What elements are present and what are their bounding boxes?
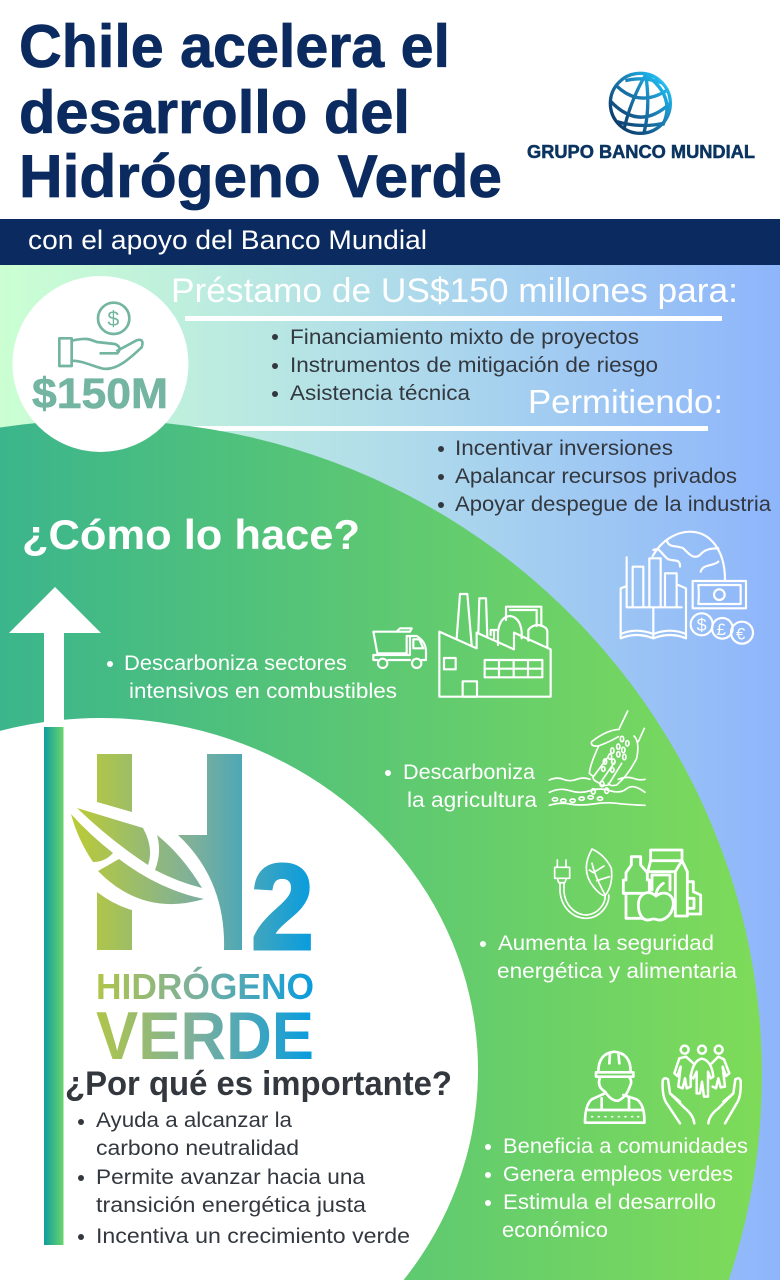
permitting list: Incentivar inversiones	[455, 437, 673, 460]
heading: como lo hace: ¿Cómo lo hace?	[22, 511, 360, 558]
subtitle band	[0, 219, 780, 265]
logo: Grupo Banco Mundial	[527, 73, 755, 162]
item: seguridad	[480, 932, 737, 983]
numeral 2: 2	[251, 839, 314, 975]
icon: hand with coin: $	[107, 307, 119, 331]
loan list: Financiamiento mixto de proyectos	[290, 326, 639, 349]
arrow	[9, 587, 101, 1245]
logo: H2 hidrogeno verde	[71, 754, 314, 1074]
icon: plug and leaf	[555, 849, 612, 918]
amount: $150M	[32, 370, 168, 418]
icon: hands holding people	[663, 1046, 741, 1123]
loan list: Asistencia técnica	[290, 382, 470, 405]
permitting heading: Permitiendo:	[528, 383, 723, 420]
icon: truck and factory	[373, 594, 551, 697]
icon: worker	[585, 1052, 644, 1123]
permitting list	[438, 437, 771, 516]
icon: globe, book, money: $	[697, 615, 707, 635]
item: agricultura: la agricultura	[407, 789, 537, 812]
item: sectores intensivos: intensivos en combustibles	[129, 680, 397, 703]
item: agricultura	[385, 761, 537, 812]
green semicircle panel	[0, 420, 762, 1280]
white inner semicircle panel	[0, 718, 478, 1280]
importance list: Incentiva un crecimiento verde	[96, 1225, 410, 1248]
permitting list: Apoyar despegue de la industria	[455, 493, 771, 516]
H right stem	[178, 754, 242, 950]
item: comunidades: Beneficia a comunidades	[503, 1135, 748, 1158]
item: comunidades: Genera empleos verdes	[503, 1163, 733, 1186]
loan heading: Préstamo de US$150 millones para:	[171, 272, 738, 310]
icon: groceries	[623, 850, 701, 920]
title: Chile acelera el	[19, 13, 450, 80]
title: desarrollo del	[19, 79, 410, 146]
item: sectores intensivos: Descarboniza sectores	[124, 652, 347, 675]
leaf	[71, 808, 204, 904]
money circle	[12, 276, 188, 452]
importance list: Ayuda a alcanzar la	[96, 1109, 292, 1132]
icon: globe, book, money	[621, 532, 753, 644]
icon: hand with coin	[59, 303, 142, 369]
importance list: Permite avanzar hacia una	[96, 1166, 365, 1189]
wordmark: HIDRÓGENO	[96, 965, 314, 1007]
item: comunidades	[485, 1135, 748, 1242]
logo: H2 hidrogeno verde: VERDE	[96, 998, 314, 1074]
icon: globe, book, money: €	[736, 624, 746, 643]
item: seguridad: energética y alimentaria	[497, 960, 737, 983]
item: sectores intensivos	[107, 652, 397, 703]
icon: globe	[610, 73, 670, 133]
item: seguridad: Aumenta la seguridad	[498, 932, 714, 955]
importance list	[78, 1109, 410, 1248]
item: comunidades: Estimula el desarrollo	[503, 1191, 716, 1214]
loan list	[272, 326, 658, 405]
H left stem	[97, 754, 132, 950]
item: comunidades: económico	[502, 1219, 608, 1242]
importance list: carbono neutralidad	[96, 1137, 299, 1160]
icon: hand sowing seeds	[549, 711, 645, 805]
logo text: GRUPO BANCO MUNDIAL	[527, 142, 755, 162]
title	[19, 13, 502, 210]
subtitle band: con el apoyo del Banco Mundial	[28, 225, 427, 255]
item: agricultura: Descarboniza	[403, 761, 535, 784]
permitting list: Apalancar recursos privados	[455, 465, 737, 488]
title: Hidrógeno Verde	[19, 143, 502, 210]
importance list: transición energética justa	[96, 1194, 366, 1217]
background panel	[0, 265, 780, 1280]
loan list: Instrumentos de mitigación de riesgo	[290, 354, 658, 377]
icon: globe, book, money: £	[717, 620, 726, 639]
heading: por que es importante: ¿Por qué es importante?	[65, 1065, 452, 1103]
